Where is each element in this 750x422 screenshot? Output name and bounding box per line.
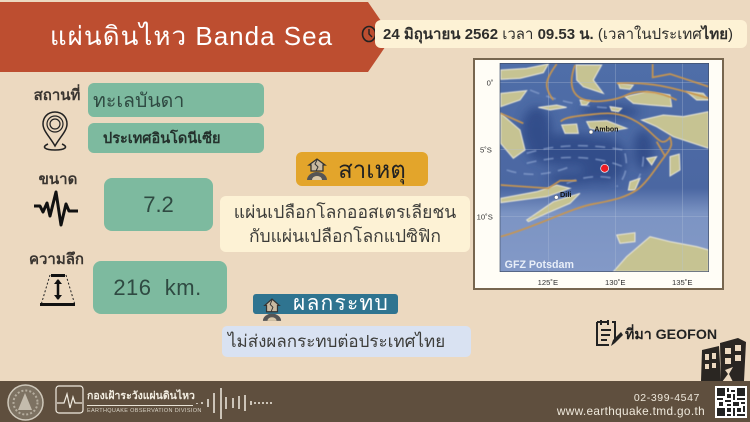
epicentre marker	[601, 164, 609, 172]
map credit: GFZ Potsdam	[505, 259, 574, 271]
icon: notepad	[596, 320, 623, 346]
map axis labels: 135˚E	[672, 278, 692, 287]
country box	[88, 123, 264, 153]
title: แผ่นดินไหว Banda Sea	[50, 20, 333, 50]
sea name box: ทะเลบันดา	[93, 90, 184, 112]
QR code	[715, 386, 747, 418]
map ocean	[500, 63, 709, 272]
division logo	[55, 385, 84, 414]
division name Thai: กองเฝ้าระวังแผ่นดินไหว	[87, 390, 195, 402]
icon: cracked house	[307, 158, 327, 180]
cause heading text: สาเหตุ	[338, 156, 406, 184]
emblem	[7, 384, 44, 421]
cause text: กับแผ่นเปลือกโลกแปซิฟิก	[249, 226, 441, 246]
contact phone: 02-399-4547	[634, 392, 700, 404]
icon: location pin	[42, 111, 68, 151]
map axis labels: 125˚E	[538, 278, 558, 287]
source	[596, 320, 717, 346]
plate boundaries	[501, 64, 709, 237]
depth box	[93, 261, 227, 314]
map land	[501, 64, 709, 272]
icon: cracked house	[262, 298, 282, 321]
magnitude box: 7.2	[143, 192, 174, 216]
contact website: www.earthquake.tmd.go.th	[557, 404, 705, 418]
map axis labels: 0˚	[487, 78, 493, 87]
map axis labels: 130˚E	[605, 278, 625, 287]
footer bar	[0, 381, 750, 422]
icon: depth	[40, 274, 76, 306]
cause text: แผ่นเปลือกโลกออสเตรเลียชน	[234, 202, 456, 222]
title banner	[0, 2, 384, 72]
icon: collapsing buildings	[701, 338, 746, 381]
impact heading text: ผลกระทบ	[293, 292, 389, 314]
label: location: สถานที่	[34, 86, 80, 104]
division name English: EARTHQUAKE OBSERVATION DIVISION	[87, 408, 202, 414]
icon: seismic wave	[34, 190, 78, 226]
cause heading	[296, 152, 428, 186]
cause text	[220, 196, 470, 252]
impact heading	[253, 294, 398, 314]
ocean ridges	[507, 90, 643, 190]
date and time pill	[375, 20, 747, 48]
map grid	[500, 63, 709, 272]
map frame	[500, 63, 709, 272]
map axis labels: 5˚S	[480, 145, 492, 154]
ocean basins	[522, 105, 653, 184]
map panel	[473, 58, 724, 290]
country box: ประเทศอินโดนีเซีย	[103, 130, 221, 146]
date and time pill: 24 มิถุนายน 2562 เวลา 09.53 น. (เวลาในประเทศไทย)	[383, 26, 733, 43]
map image	[500, 63, 709, 272]
icon: clock	[362, 26, 375, 42]
sea name box	[88, 83, 264, 117]
magnitude box	[104, 178, 213, 231]
division name Thai	[87, 387, 193, 406]
label: magnitude: ขนาด	[39, 171, 77, 188]
map city: Dili: Dili	[560, 190, 571, 199]
sound wave decoration	[196, 388, 272, 419]
impact text: ไม่ส่งผลกระทบต่อประเทศไทย	[228, 332, 445, 351]
map axis labels: 10˚S	[477, 213, 493, 222]
map city: Ambon: Ambon	[594, 127, 618, 134]
source text: ที่มา GEOFON	[625, 327, 717, 343]
map city: Dili	[554, 190, 571, 199]
label: depth: ความลึก	[29, 251, 84, 268]
impact text	[222, 326, 471, 357]
map axis labels	[477, 78, 692, 287]
depth box: 216 km.	[113, 274, 202, 300]
